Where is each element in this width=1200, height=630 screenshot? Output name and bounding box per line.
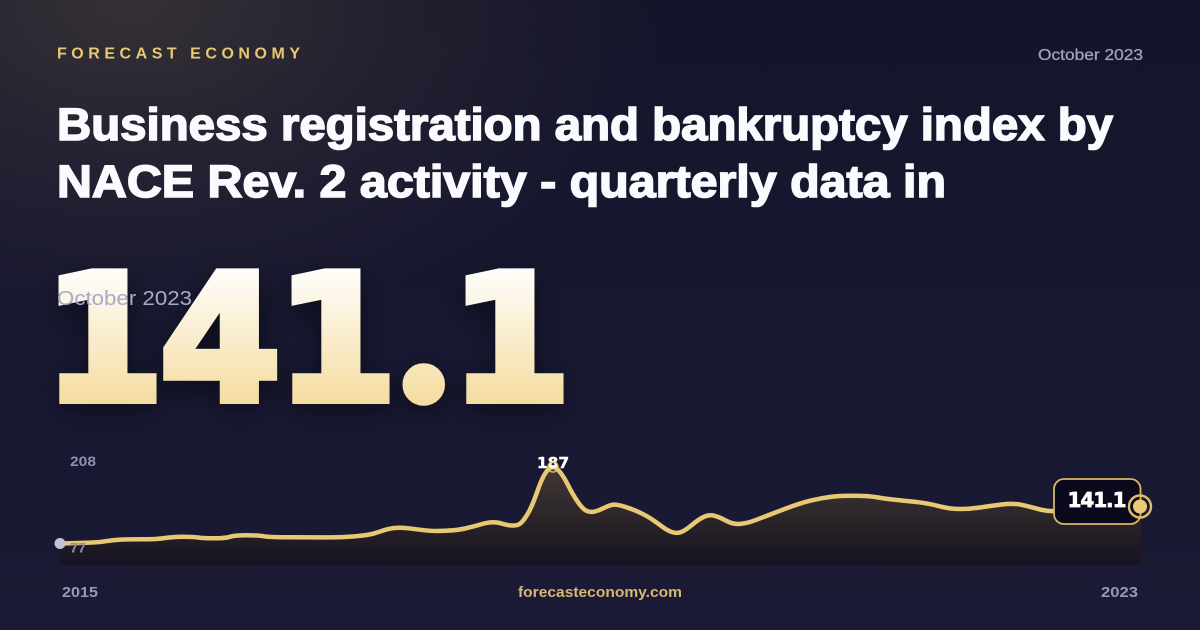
website: forecasteconomy.com — [518, 584, 682, 601]
date subtitle: October 2023 — [57, 288, 192, 310]
title — [57, 99, 1114, 207]
big value: 1411 — [43, 239, 572, 442]
axis min label: 77 — [70, 540, 86, 556]
line chart — [60, 467, 1141, 565]
title: NACE Rev. 2 activity - quarterly data in — [57, 156, 946, 207]
date top right: October 2023 — [1038, 47, 1143, 64]
value callout: 141.1 — [1068, 488, 1126, 512]
peak marker — [548, 462, 558, 472]
end year: 2023 — [1101, 584, 1138, 601]
big value: . — [391, 169, 456, 459]
end point marker — [1129, 496, 1151, 518]
brand label: FORECAST ECONOMY — [57, 46, 300, 62]
trend line — [60, 467, 1057, 544]
start year: 2015 — [62, 584, 98, 601]
title: Business registration and bankruptcy index by — [57, 99, 1114, 150]
value callout — [1054, 479, 1140, 524]
axis max label: 208 — [70, 454, 97, 469]
peak label: 187 — [537, 454, 569, 472]
start point — [54, 538, 66, 549]
area under line — [60, 467, 1141, 565]
big value — [43, 169, 572, 459]
